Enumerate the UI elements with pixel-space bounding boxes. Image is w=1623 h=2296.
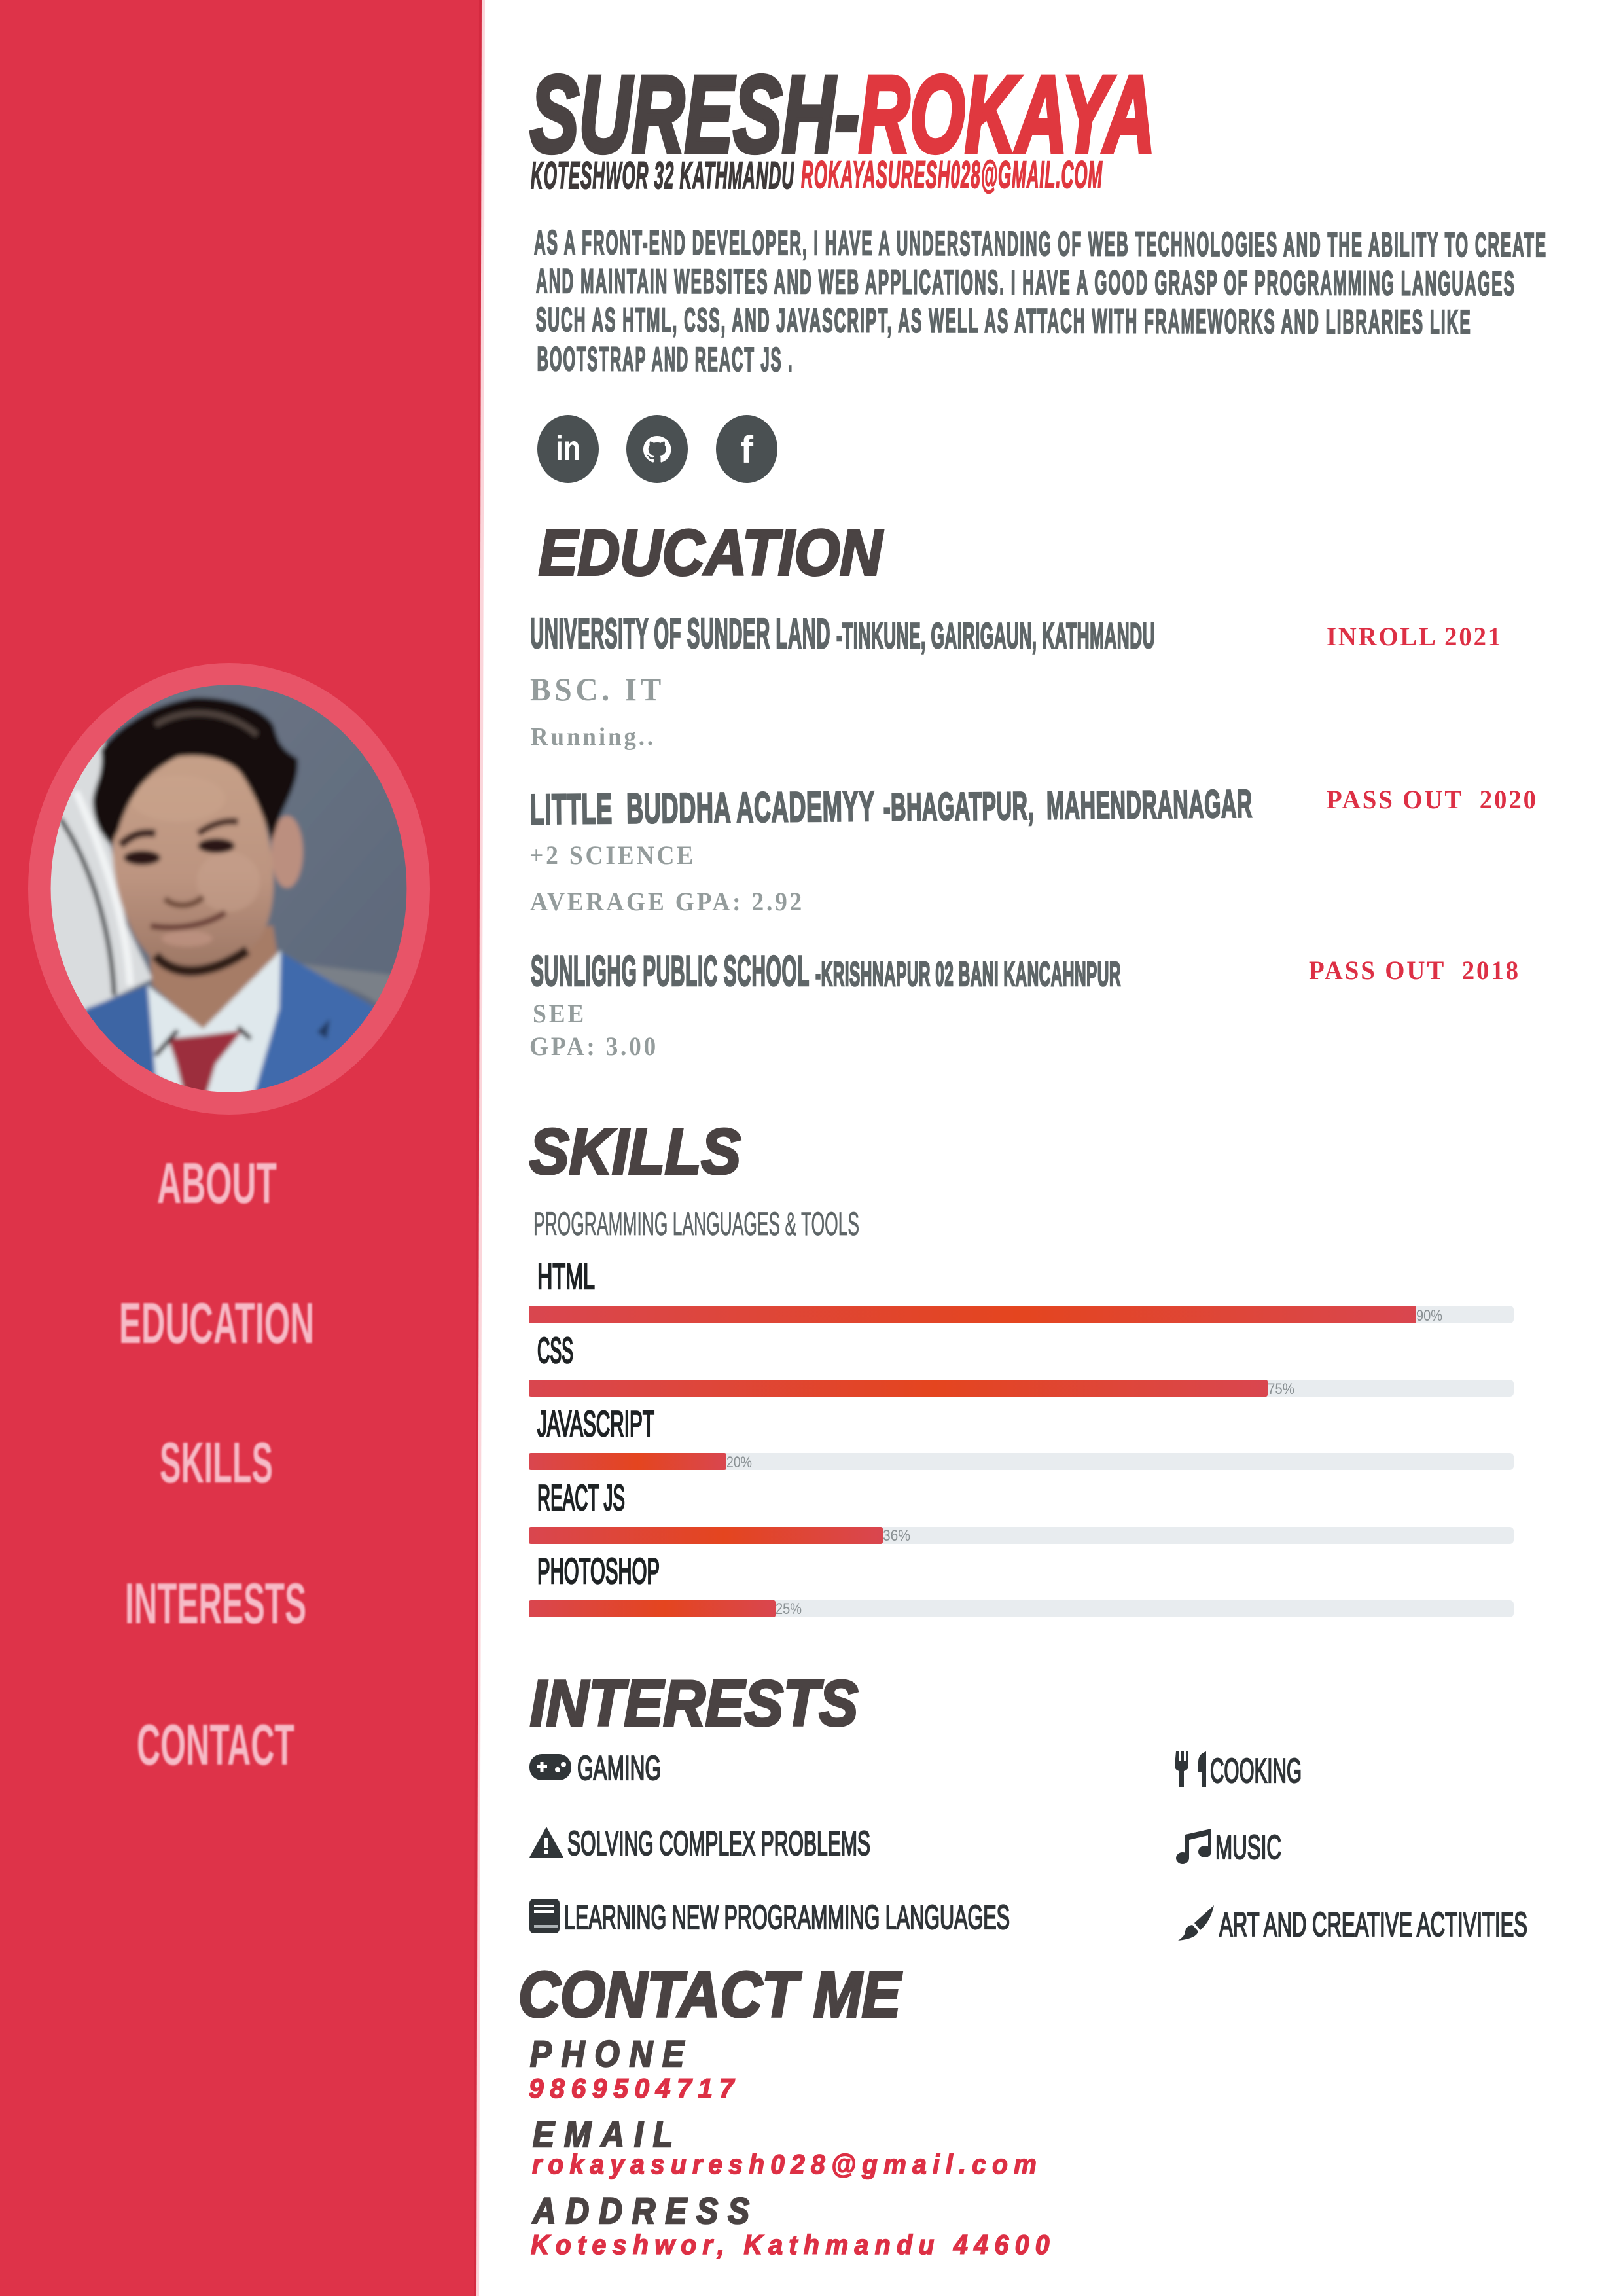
contact: phone: PHONE bbox=[530, 2033, 694, 2074]
skill: javascript 20%: 20% bbox=[726, 1454, 752, 1471]
icon: fork and knife bbox=[1175, 1751, 1206, 1787]
skill: html 90%: HTML bbox=[537, 1256, 595, 1297]
interest: gaming bbox=[529, 1749, 661, 1787]
skill: html 90%: 90% bbox=[1416, 1307, 1442, 1325]
icon: paint brush bbox=[1178, 1905, 1214, 1941]
education entry: high school: +2 SCIENCE bbox=[529, 840, 696, 870]
skill: react js 36%: 36% bbox=[883, 1527, 910, 1545]
education entry: university: INROLL 2021 bbox=[1327, 622, 1503, 651]
title: name: ROKAYA bbox=[859, 54, 1155, 175]
icon: facebook: f bbox=[740, 429, 754, 471]
icon: gamepad bbox=[529, 1754, 571, 1780]
skill: html 90% bbox=[529, 1256, 1514, 1325]
icon: linkedin: in bbox=[556, 429, 580, 468]
skill: css 75%: CSS bbox=[537, 1330, 573, 1371]
navigation menu bbox=[119, 1151, 314, 1777]
interest: cooking bbox=[1175, 1751, 1302, 1790]
interest: learning new programming languages: LEARNING NEW PROGRAMMING LANGUAGES bbox=[564, 1899, 1010, 1937]
icon: linkedin bbox=[537, 415, 599, 483]
interest: solving complex problems: SOLVING COMPLEX PROBLEMS bbox=[567, 1825, 870, 1863]
subheading: programming languages and tools: PROGRAMMING LANGUAGES & TOOLS bbox=[533, 1206, 859, 1242]
education entry: high school: AVERAGE GPA: 2.92 bbox=[530, 887, 804, 916]
education entry: university: UNIVERSITY OF SUNDER LAND bbox=[530, 609, 830, 657]
navigation menu: EDUCATION bbox=[119, 1291, 314, 1355]
skill: photoshop 25%: PHOTOSHOP bbox=[537, 1551, 660, 1591]
education entry: school: SEE bbox=[533, 999, 586, 1028]
skill: react js 36%: REACT JS bbox=[537, 1477, 625, 1518]
heading: contact me: CONTACT ME bbox=[518, 1958, 902, 2030]
contact: email bbox=[532, 2113, 1043, 2179]
photo ring bbox=[28, 663, 430, 1115]
social icons bbox=[537, 415, 777, 483]
contact: phone bbox=[529, 2033, 740, 2104]
resume page: ROKAYASURESH028@GMAIL.COM bbox=[801, 154, 1103, 196]
interest: art and creative activities bbox=[1178, 1905, 1527, 1944]
interest: music: MUSIC bbox=[1215, 1829, 1281, 1867]
title: name: SURESH- bbox=[530, 54, 859, 175]
icon: github bbox=[626, 415, 688, 483]
education entry: school: -KRISHNAPUR 02 BANI KANCAHNPUR bbox=[815, 956, 1121, 994]
contact: address: Koteshwor, Kathmandu 44600 bbox=[531, 2229, 1056, 2260]
skill: css 75%: 75% bbox=[1268, 1380, 1294, 1398]
icon: book bbox=[529, 1899, 560, 1933]
education entry: university bbox=[530, 609, 1503, 751]
navigation menu: ABOUT bbox=[157, 1151, 277, 1215]
education entry: high school: LITTLE BUDDHA ACADEMYY bbox=[529, 782, 875, 833]
heading: interests: INTERESTS bbox=[530, 1667, 858, 1739]
panel: red sidebar bbox=[0, 0, 485, 2296]
skill: javascript 20%: JAVASCRIPT bbox=[537, 1403, 654, 1444]
icon: music note bbox=[1176, 1829, 1211, 1864]
education entry: high school: PASS OUT 2020 bbox=[1327, 785, 1538, 814]
skill: css 75% bbox=[529, 1330, 1514, 1398]
about paragraph bbox=[533, 224, 1547, 381]
navigation menu: CONTACT bbox=[137, 1712, 294, 1777]
icon: facebook bbox=[716, 415, 777, 483]
heading: education: EDUCATION bbox=[539, 516, 883, 588]
education entry: university: Running.. bbox=[531, 723, 656, 751]
navigation menu: INTERESTS bbox=[125, 1571, 306, 1636]
profile photo bbox=[28, 663, 430, 1115]
navigation menu: SKILLS bbox=[160, 1430, 273, 1495]
contact: address bbox=[531, 2190, 1056, 2260]
education entry: school: SUNLIGHG PUBLIC SCHOOL bbox=[531, 946, 810, 995]
interest: gaming: GAMING bbox=[577, 1749, 661, 1787]
skill: react js 36% bbox=[529, 1477, 1514, 1545]
contact: email: EMAIL bbox=[533, 2113, 683, 2155]
education entry: school: GPA: 3.00 bbox=[529, 1031, 658, 1061]
heading: skills: SKILLS bbox=[529, 1115, 741, 1187]
skill: photoshop 25% bbox=[529, 1551, 1514, 1618]
about paragraph: BOOTSTRAP AND REACT JS . bbox=[537, 340, 794, 379]
interest: cooking: COOKING bbox=[1210, 1752, 1302, 1790]
interest: music bbox=[1176, 1829, 1281, 1867]
icon: warning triangle bbox=[530, 1828, 563, 1857]
skill: javascript 20% bbox=[529, 1403, 1514, 1471]
education entry: school: PASS OUT 2018 bbox=[1309, 956, 1520, 985]
contact: address: ADDRESS bbox=[531, 2190, 759, 2231]
education entry: university: -TINKUNE, GAIRIGAUN, KATHMANDU bbox=[836, 615, 1155, 656]
interest: learning new programming languages bbox=[529, 1899, 1010, 1937]
interest: solving complex problems bbox=[530, 1825, 870, 1863]
contact: phone: 9869504717 bbox=[529, 2073, 740, 2104]
portrait bbox=[45, 678, 416, 1105]
contact: email: rokayasuresh028@gmail.com bbox=[532, 2149, 1043, 2179]
bar chart: skills bbox=[529, 1256, 1514, 1618]
education entry: high school: -BHAGATPUR, MAHENDRANAGAR bbox=[883, 781, 1253, 829]
contact subtitle: KOTESHWOR 32 KATHMANDU bbox=[531, 154, 794, 197]
education entry: university: BSC. IT bbox=[530, 671, 665, 708]
education entry: school bbox=[529, 946, 1520, 1061]
education entry: high school bbox=[529, 778, 1538, 916]
skill: photoshop 25%: 25% bbox=[776, 1600, 802, 1618]
